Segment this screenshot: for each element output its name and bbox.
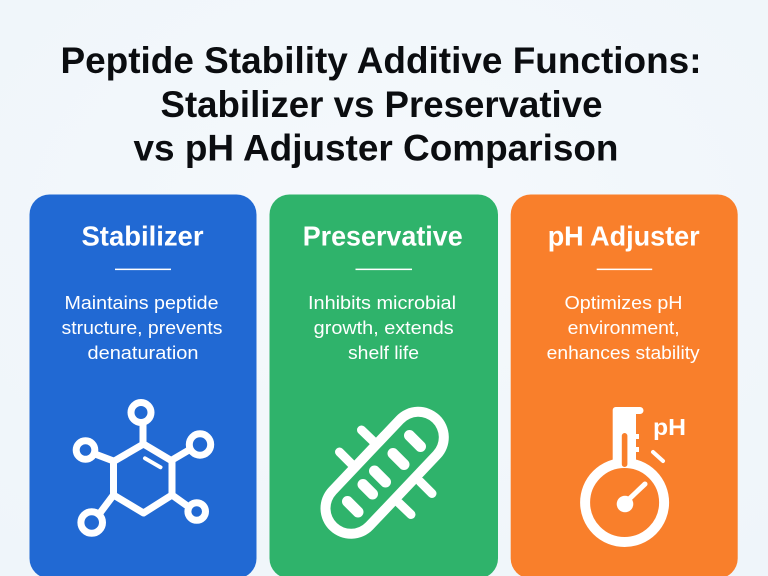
heading: preservative: Preservative bbox=[303, 220, 463, 252]
green card background bbox=[270, 194, 498, 576]
description: stabilizer: Maintains peptide bbox=[64, 292, 218, 313]
description: ph adjuster: Optimizes pH bbox=[564, 292, 682, 313]
description: preservative: growth, extends bbox=[314, 317, 454, 338]
panel: stabilizer bbox=[30, 194, 256, 576]
heading: stabilizer: Stabilizer bbox=[82, 220, 204, 252]
description: stabilizer: denaturation bbox=[88, 342, 198, 363]
icon: bacterium bbox=[340, 430, 432, 514]
description: ph adjuster: enhances stability bbox=[547, 342, 700, 363]
description: stabilizer: structure, prevents bbox=[62, 317, 222, 338]
title: Peptide Stability Additive Functions: bbox=[60, 39, 702, 81]
description: ph adjuster: environment, bbox=[568, 317, 680, 338]
icon: ph flask gauge: pH bbox=[653, 414, 686, 440]
description: stabilizer bbox=[62, 292, 222, 363]
title bbox=[60, 39, 702, 168]
heading: ph adjuster: pH Adjuster bbox=[548, 220, 700, 252]
panel: preservative bbox=[270, 194, 498, 576]
description: ph adjuster bbox=[547, 292, 700, 363]
icon: ph flask gauge bbox=[585, 407, 686, 542]
panel: ph adjuster bbox=[511, 194, 738, 576]
icon: molecule bbox=[76, 402, 211, 533]
title: Stabilizer vs Preservative bbox=[160, 83, 602, 125]
description: preservative bbox=[308, 292, 456, 363]
title: vs pH Adjuster Comparison bbox=[134, 126, 618, 168]
description: preservative: Inhibits microbial bbox=[308, 292, 456, 313]
blue card background bbox=[30, 194, 256, 576]
orange card background bbox=[511, 194, 738, 576]
description: preservative: shelf life bbox=[348, 342, 419, 363]
